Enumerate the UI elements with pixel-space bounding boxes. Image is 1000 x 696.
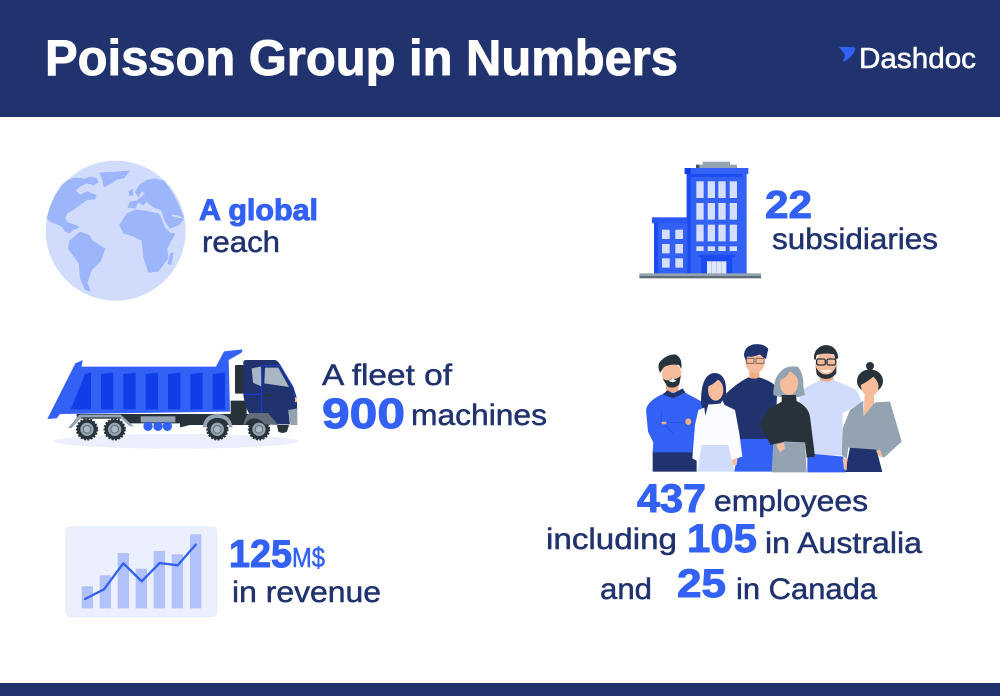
icon: dump truck [47,349,298,449]
icon: office buildings [639,162,761,278]
number: 25: 25 [677,562,726,606]
icon: globe [46,161,186,301]
text: in revenue: in revenue [232,576,381,609]
text: in Australia: in Australia [765,527,923,560]
heading: a global: A global [199,194,318,227]
number: 105: 105 [687,517,757,561]
person: woman in black with grey hair [760,366,815,472]
text: machines: machines [411,399,547,432]
text: and: and [600,573,652,606]
person: man in light sweater [798,345,861,472]
number: 125M$: 125M$ [229,533,325,576]
text: subsidiaries: subsidiaries [772,223,938,256]
number: 22: 22 [765,184,812,227]
footer band [0,683,1000,696]
person: woman in white [692,373,742,472]
text: reach: reach [202,226,280,259]
number: 437: 437 [637,477,706,521]
text: a fleet of: A fleet of [322,359,453,392]
panel: employees [546,344,923,606]
icon: revenue chart [66,527,217,617]
person: man in navy sweater [722,344,777,472]
text: in Canada: in Canada [736,573,878,606]
header band [0,0,1000,117]
panel: revenue [66,527,381,617]
Dashdoc logo: Dashdoc [859,43,976,75]
panel: global reach [46,161,318,301]
text: including: including [546,523,677,556]
person: man in blue sweater [646,354,704,472]
title: Poisson Group in Numbers [45,30,678,86]
truck cab [235,360,297,433]
panel: subsidiaries [639,162,938,278]
text: employees: employees [714,485,868,518]
number: 900: 900 [322,390,405,438]
panel: fleet [47,349,547,449]
person: woman in grey blouse [842,362,902,472]
icon: group of people [646,344,902,472]
